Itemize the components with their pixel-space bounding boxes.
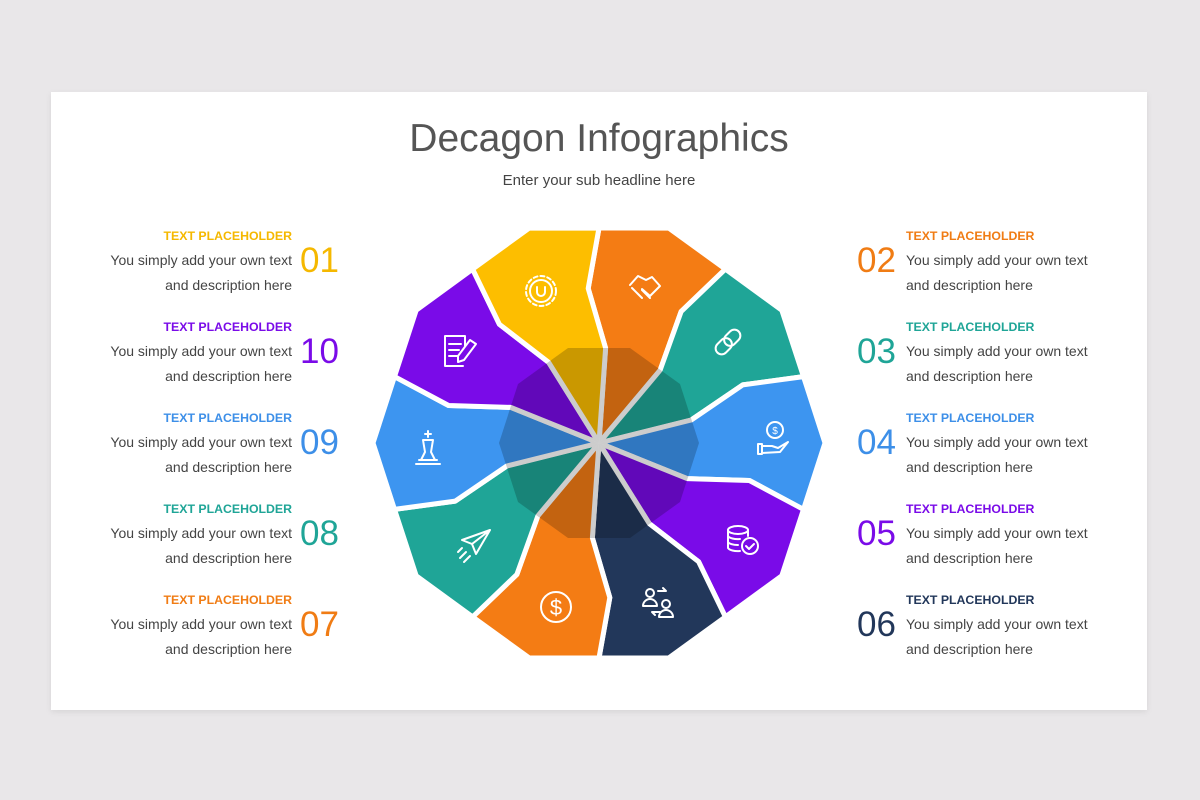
number 03: 03 [857, 332, 896, 371]
text block 01: and description here [165, 277, 292, 293]
segment: purple right [599, 443, 804, 617]
text block 05: and description here [906, 550, 1033, 566]
text block 08 [110, 502, 292, 566]
icon: paper plane [458, 530, 490, 562]
text block 04: TEXT PLACEHOLDER [906, 411, 1034, 425]
chart: decagon [376, 230, 822, 656]
text block 02: TEXT PLACEHOLDER [906, 229, 1034, 243]
number 06: 06 [857, 605, 896, 644]
text block 07 [110, 593, 292, 657]
text block 07: TEXT PLACEHOLDER [164, 593, 292, 607]
text block 09: TEXT PLACEHOLDER [164, 411, 292, 425]
panel: main card [51, 92, 1147, 710]
subtitle: Enter your sub headline here [503, 172, 695, 189]
number 10: 10 [300, 332, 339, 371]
icon: handshake [630, 276, 660, 298]
segment: teal left [394, 443, 599, 617]
text block 10 [110, 320, 292, 384]
text block 05 [906, 502, 1088, 566]
text block 08: and description here [165, 550, 292, 566]
icon: people exchange [643, 588, 673, 617]
text block 09: You simply add your own text [110, 434, 292, 450]
segment: navy bottom [592, 443, 725, 658]
title: Decagon Infographics [409, 117, 789, 160]
text block 02: and description here [906, 277, 1033, 293]
number 04: 04 [857, 423, 896, 462]
number 09: 09 [300, 423, 339, 462]
text block 02 [906, 229, 1088, 293]
icon: link [713, 327, 743, 357]
number 05: 05 [857, 514, 896, 553]
text block 06: and description here [906, 641, 1033, 657]
segment: blue right [599, 377, 825, 509]
text block 10: TEXT PLACEHOLDER [164, 320, 292, 334]
inner shading [499, 348, 699, 538]
text block 01 [110, 229, 292, 293]
icon: document pen [445, 336, 476, 366]
number 07: 07 [300, 605, 339, 644]
icon: database check [728, 526, 758, 554]
text block 01: You simply add your own text [110, 252, 292, 268]
text block 08: You simply add your own text [110, 525, 292, 541]
text block 02: You simply add your own text [906, 252, 1088, 268]
text block 03: and description here [906, 368, 1033, 384]
number 02: 02 [857, 241, 896, 280]
text block 06 [906, 593, 1088, 657]
text block 06: TEXT PLACEHOLDER [906, 593, 1034, 607]
text block 04 [906, 411, 1088, 475]
text block 05: You simply add your own text [906, 525, 1088, 541]
segment: purple left [394, 269, 599, 443]
text block 04: and description here [906, 459, 1033, 475]
number 01: 01 [300, 241, 339, 280]
text block 10: and description here [165, 368, 292, 384]
number 08: 08 [300, 514, 339, 553]
icon: chess king [416, 431, 440, 464]
text block 03 [906, 320, 1088, 384]
segment: yellow top [473, 228, 606, 443]
icon: hand coin [758, 422, 788, 454]
segment: teal right [599, 269, 804, 443]
text block 06: You simply add your own text [906, 616, 1088, 632]
segment: orange top [588, 228, 725, 443]
text block 01: TEXT PLACEHOLDER [164, 229, 292, 243]
text block 03: TEXT PLACEHOLDER [906, 320, 1034, 334]
text block 03: You simply add your own text [906, 343, 1088, 359]
text block 10: You simply add your own text [110, 343, 292, 359]
segment: blue left [373, 377, 599, 509]
icon: gear [526, 276, 556, 306]
segment: orange bottom [473, 443, 610, 658]
icon: dollar coin [541, 592, 571, 622]
text block 09 [110, 411, 292, 475]
text block 07: and description here [165, 641, 292, 657]
text block 05: TEXT PLACEHOLDER [906, 502, 1034, 516]
icon: hand coin: $ [772, 426, 778, 437]
text block 07: You simply add your own text [110, 616, 292, 632]
text block 04: You simply add your own text [906, 434, 1088, 450]
text block 08: TEXT PLACEHOLDER [164, 502, 292, 516]
icon: dollar coin: $ [550, 595, 562, 620]
text block 09: and description here [165, 459, 292, 475]
